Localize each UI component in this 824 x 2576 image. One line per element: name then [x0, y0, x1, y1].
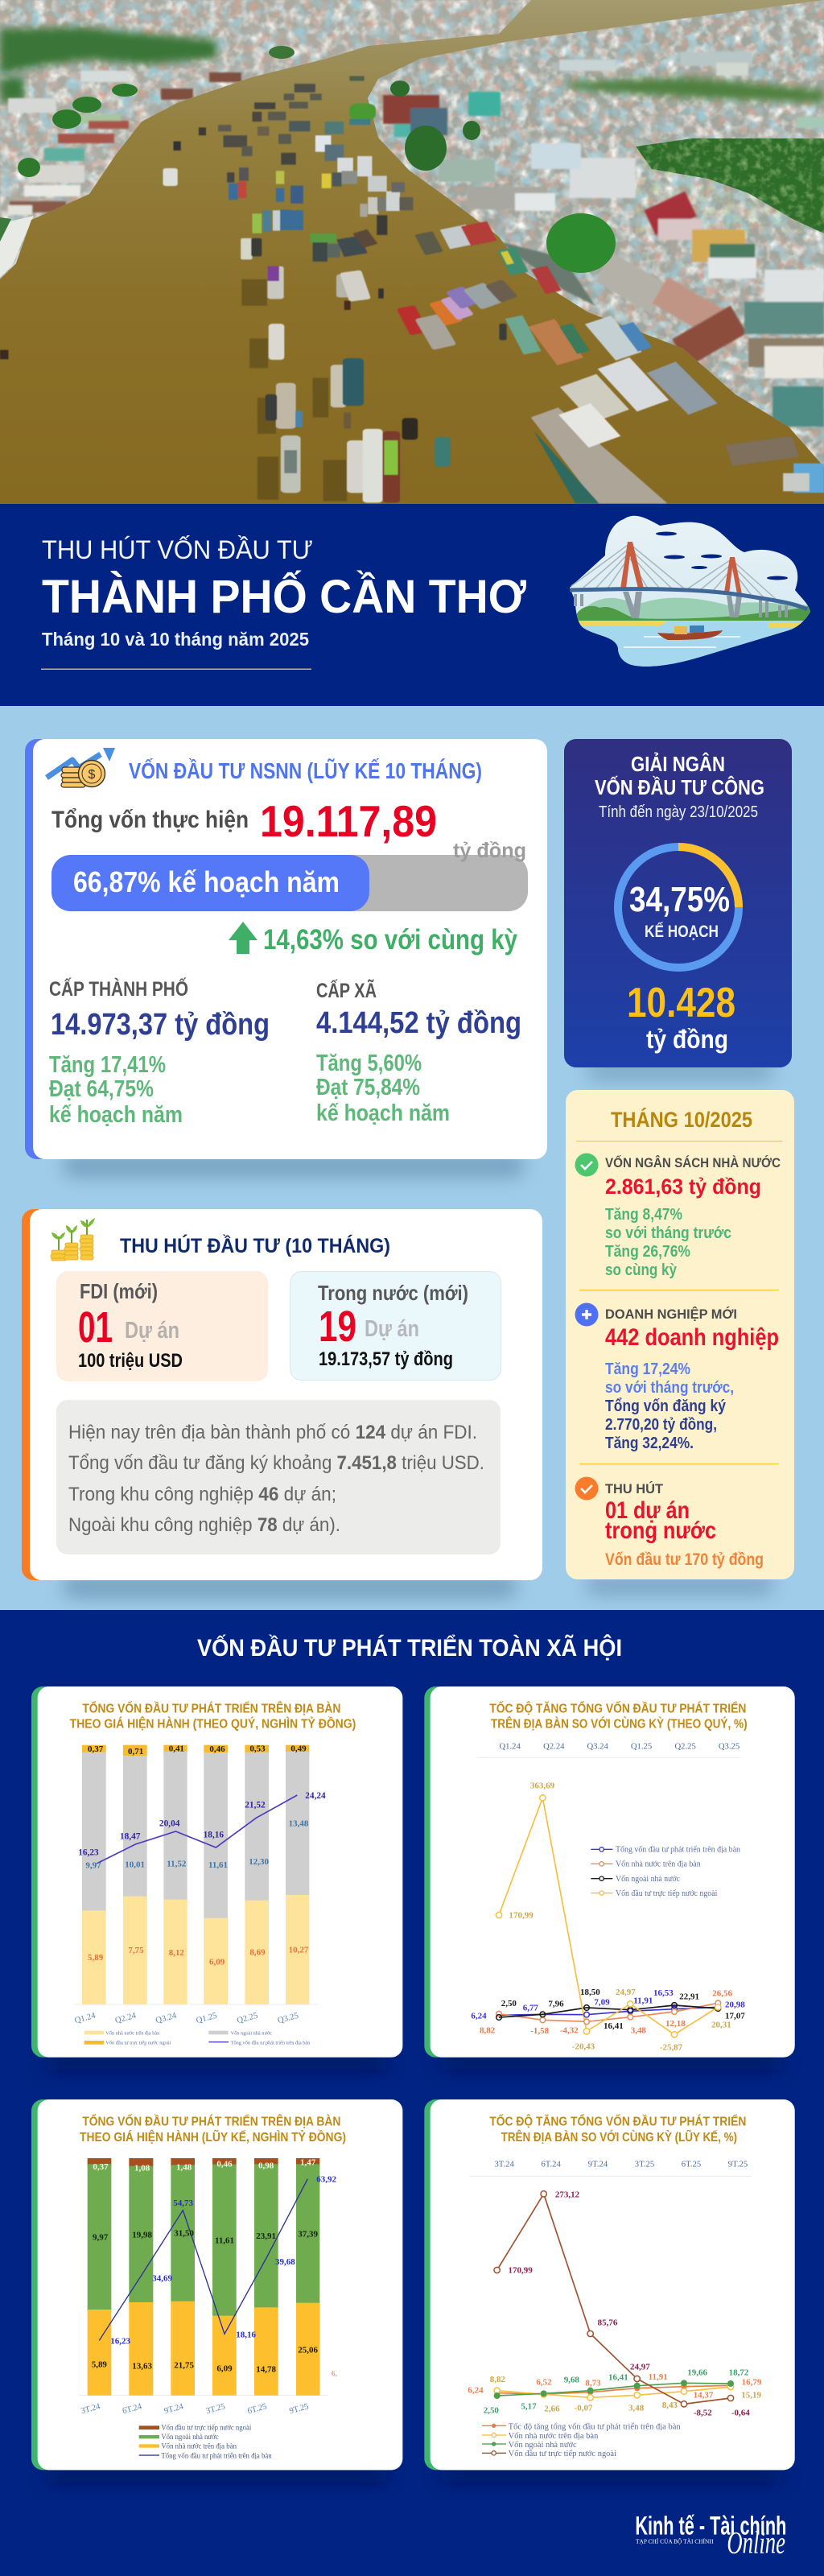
commune level column: Tăng 5,60%	[316, 1051, 422, 1076]
line chart: 2,50	[501, 1999, 517, 2008]
line chart	[468, 2161, 762, 2418]
stacked bar chart: 16,23	[78, 1847, 99, 1857]
line chart: 16,79	[742, 2377, 762, 2387]
stacked bar chart: 0,37	[93, 2162, 109, 2172]
stacked bar chart: 18,16	[236, 2330, 257, 2340]
new enterprises block: Tăng 17,24%	[605, 1360, 690, 1378]
stacked bar chart	[74, 1744, 326, 2025]
chart legend: Tổng vốn đầu tư phát triển trên địa bàn	[161, 2451, 272, 2459]
new enterprises block: so với tháng trước,	[605, 1379, 734, 1397]
stacked bar chart: 39,68	[275, 2257, 295, 2267]
logo: Kinh te - Tai chinh Online: TẠP CHÍ CỦA BỘ TÀI CHÍNH	[636, 2537, 714, 2545]
card: FDI: 100 triệu USD	[78, 1350, 183, 1372]
card: FDI: 01	[78, 1303, 113, 1352]
panel: investment attraction	[22, 1209, 542, 1580]
stacked bar chart: 10,01	[125, 1860, 145, 1870]
state budget block: VỐN NGÂN SÁCH NHÀ NƯỚC	[605, 1154, 781, 1170]
state budget block: Tăng 26,76%	[605, 1243, 690, 1261]
chart legend: Vốn đầu tư trực tiếp nước ngoài	[105, 2040, 171, 2046]
line chart: 8,43	[662, 2401, 678, 2410]
chart title	[489, 2113, 746, 2145]
icon: coins with rising arrow	[47, 748, 115, 787]
line chart: 18,50	[580, 1988, 600, 1997]
city level column: Đạt 64,75%	[49, 1076, 154, 1102]
state budget block: 2.861,63 tỷ đồng	[605, 1174, 761, 1199]
chart panel: total investment by quarter	[31, 1686, 402, 2058]
chart title	[80, 2113, 346, 2145]
stacked bar chart: 6T.25	[246, 2402, 268, 2416]
card: FDI: FDI (mới)	[80, 1279, 158, 1303]
date note: Tính đến ngày 23/10/2025	[599, 803, 758, 821]
progress bar track	[52, 855, 528, 911]
attraction block: THU HÚT	[605, 1481, 664, 1496]
line chart: 6T.24	[541, 2161, 562, 2169]
stacked bar chart: 7,75	[128, 1946, 144, 1955]
line chart: 16,41	[604, 2021, 624, 2031]
line chart: 20,98	[725, 2000, 745, 2010]
stacked bar chart: 0,53	[249, 1744, 266, 1754]
chart legend: Vốn ngoài nhà nước	[509, 2441, 577, 2450]
stacked bar chart: 5,89	[92, 2359, 107, 2369]
light blue section background	[0, 706, 824, 1610]
line chart: Q2.25	[674, 1743, 696, 1752]
heading	[595, 752, 764, 799]
city level column: CẤP THÀNH PHỐ	[49, 976, 188, 1001]
stacked bar chart: 23,91	[256, 2231, 276, 2241]
line chart: 6,52	[536, 2378, 552, 2388]
line chart: 14,37	[694, 2390, 714, 2400]
gold rule	[41, 668, 311, 670]
chart legend: Vốn nhà nước trên địa bàn	[161, 2442, 237, 2450]
city level column	[49, 976, 270, 1128]
line chart: 11,91	[649, 2372, 668, 2382]
line chart: 22,91	[679, 1992, 699, 2001]
stacked bar chart: 5,89	[88, 1953, 104, 1963]
icon: coin stacks with sprouts	[51, 1218, 95, 1261]
stacked bar chart: 9,97	[85, 1861, 101, 1871]
new enterprises block: Tăng 32,24%.	[605, 1435, 694, 1452]
chart title: TỐC ĐỘ TĂNG TỔNG VỐN ĐẦU TƯ PHÁT TRIỂN	[489, 1700, 746, 1716]
stacked bar chart: Q1.25	[196, 2012, 218, 2025]
line chart: 7,96	[548, 2000, 564, 2009]
total capital value: 19.117,89	[260, 796, 437, 846]
disbursed value: 10.428	[627, 980, 735, 1026]
stacked bar chart: 9T.25	[288, 2402, 310, 2416]
chart title: TRÊN ĐỊA BÀN SO VỚI CÙNG KỲ (LŨY KẾ, %)	[501, 2128, 737, 2145]
stacked bar chart: 18,47	[120, 1831, 141, 1841]
donut chart: 34,75%	[629, 880, 730, 919]
line chart: 8,82	[490, 2375, 505, 2384]
card: domestic: Trong nước (mới)	[318, 1281, 468, 1305]
stacked bar chart: 54,73	[173, 2198, 194, 2208]
heading: VỐN ĐẦU TƯ NSNN (LŨY KẾ 10 THÁNG)	[129, 758, 482, 783]
chart legend: Vốn ngoài nhà nước	[231, 2031, 272, 2037]
card: FDI: Dự án	[125, 1318, 179, 1344]
stacked bar chart: 20,04	[159, 1818, 180, 1828]
subtitle: Tháng 10 và 10 tháng năm 2025	[42, 629, 309, 650]
line chart: 12,18	[665, 2019, 686, 2029]
line chart: 17,07	[725, 2012, 745, 2021]
state budget block: Tăng 8,47%	[605, 1206, 682, 1224]
line chart: 16,41	[608, 2373, 628, 2383]
stacked bar chart: 11,61	[215, 2236, 234, 2246]
attraction block: trong nước	[605, 1517, 716, 1544]
stacked bar chart: 31,50	[174, 2228, 195, 2238]
stacked bar chart: 34,69	[152, 2273, 173, 2283]
card: domestic: Dự án	[365, 1316, 419, 1342]
FDI summary text box	[56, 1400, 501, 1554]
FDI summary text box: Ngoài khu công nghiệp 78 dự án).	[68, 1514, 340, 1536]
line chart: 18,72	[729, 2368, 749, 2378]
line chart: 9,68	[564, 2376, 579, 2385]
line chart: -8,52	[694, 2409, 712, 2418]
stacked bar chart: 6,	[332, 2370, 337, 2378]
river boat	[657, 625, 723, 640]
chart legend: Vốn ngoài nhà nước	[616, 1875, 681, 1884]
unit label: tỷ đồng	[453, 838, 526, 862]
FDI summary text box: Trong khu công nghiệp 46 dự án;	[68, 1484, 336, 1505]
year on year growth: 14,63% so với cùng kỳ	[263, 924, 517, 956]
stacked bar chart: 14,78	[256, 2364, 277, 2374]
stacked bar chart: 1,48	[176, 2162, 192, 2172]
stacked bar chart: 12,30	[249, 1857, 270, 1867]
stacked bar chart: 0,46	[216, 2159, 233, 2169]
commune level column: kế hoạch năm	[316, 1100, 450, 1126]
boats and moored houses, drawn in a stretched grid	[0, 76, 824, 503]
total capital label: Tổng vốn thực hiện	[52, 807, 249, 833]
chart title: THEO GIÁ HIỆN HÀNH (THEO QUÝ, NGHÌN TỶ ĐỒNG)	[70, 1716, 356, 1732]
chart legend	[482, 2422, 681, 2458]
stacked bar chart: 25,06	[298, 2345, 319, 2355]
stacked bar chart: Q2.25	[236, 2012, 259, 2025]
line chart: 85,76	[598, 2318, 618, 2328]
donut chart	[618, 847, 739, 968]
stacked bar chart: 21,75	[174, 2360, 195, 2370]
donut chart: KẾ HOẠCH	[645, 923, 719, 941]
new enterprises block: DOANH NGHIỆP MỚI	[605, 1307, 737, 1322]
section heading: VỐN ĐẦU TƯ PHÁT TRIỂN TOÀN XÃ HỘI	[197, 1634, 622, 1662]
line chart: 20,31	[711, 2021, 731, 2030]
chart legend: Vốn nhà nước trên địa bàn	[616, 1860, 701, 1869]
line chart: 26,56	[712, 1989, 733, 1999]
chart legend: Vốn đầu tư trực tiếp nước ngoài	[161, 2424, 252, 2432]
stacked bar chart: 21,52	[245, 1800, 266, 1810]
main title: THÀNH PHỐ CẦN THƠ	[42, 571, 526, 623]
stacked bar chart: 8,69	[249, 1948, 266, 1958]
commune level column	[316, 978, 521, 1126]
line chart: 3T.25	[635, 2161, 654, 2169]
stacked bar chart: 24,24	[305, 1791, 326, 1801]
stacked bar chart: 0,46	[209, 1744, 225, 1754]
new enterprises block: 2.770,20 tỷ đồng,	[605, 1416, 717, 1434]
chart title: THEO GIÁ HIỆN HÀNH (LŨY KẾ, NGHÌN TỶ ĐỒNG)	[80, 2128, 346, 2145]
line chart: 363,69	[530, 1781, 555, 1791]
state budget block: so với tháng trước	[605, 1224, 731, 1242]
line chart: 24,97	[630, 2363, 650, 2372]
line chart: -1,58	[530, 2026, 550, 2036]
state budget block	[605, 1154, 781, 1279]
bridge deck	[570, 589, 807, 609]
line chart: 3,48	[631, 2025, 646, 2035]
stacked bar chart: 13,48	[289, 1818, 309, 1828]
logo: Kinh te - Tai chinh Online	[635, 2511, 786, 2561]
stacked bar chart: 6T.24	[122, 2402, 143, 2416]
stacked bar chart: 9T.24	[163, 2402, 185, 2416]
line chart: 2,66	[544, 2404, 560, 2413]
icon: Can Tho bridge illustration	[570, 515, 810, 667]
line chart: 7,09	[594, 1998, 610, 2008]
line chart: 19,66	[687, 2368, 708, 2378]
attraction block: Vốn đầu tư 170 tỷ đồng	[605, 1550, 764, 1569]
line chart: 2,50	[484, 2405, 499, 2415]
line chart: 6T.25	[682, 2161, 701, 2169]
line chart: 6,77	[523, 2003, 538, 2013]
chart legend: Vốn đầu tư trực tiếp nước ngoài	[509, 2450, 616, 2458]
line chart: 5,17	[521, 2402, 537, 2412]
line chart: Q3.24	[587, 1743, 609, 1752]
stacked bar chart: Q2.24	[114, 2012, 138, 2025]
chart legend: Vốn ngoài nhà nước	[161, 2433, 219, 2441]
city level column: Tăng 17,41%	[49, 1052, 166, 1078]
stacked bar chart: 18,16	[204, 1831, 224, 1840]
heading: THÁNG 10/2025	[611, 1107, 752, 1132]
panel: NSNN investment capital	[25, 739, 547, 1159]
title kicker: THU HÚT VỐN ĐẦU TƯ	[42, 535, 313, 564]
line chart: Q1.24	[499, 1743, 521, 1752]
chart panel: growth rate by quarter	[424, 1686, 795, 2058]
stacked bar chart: 0,41	[169, 1744, 184, 1753]
photo: floating market on the river	[0, 0, 824, 504]
stacked bar chart: 1,47	[300, 2157, 316, 2167]
line chart: -0,07	[575, 2403, 593, 2413]
line chart: 8,73	[585, 2378, 601, 2388]
chart title	[489, 1700, 748, 1732]
stacked bar chart: 3T.24	[80, 2402, 101, 2416]
stacked bar chart: 6,09	[209, 1957, 225, 1967]
new enterprises block: Tổng vốn đăng ký	[605, 1397, 727, 1415]
commune level column: 4.144,52 tỷ đồng	[316, 1006, 521, 1040]
chart legend: Vốn đầu tư trực tiếp nước ngoài	[616, 1889, 718, 1898]
line chart: 8,82	[480, 2025, 496, 2035]
line chart: -4,32	[560, 2025, 579, 2035]
chart panel: cumulative total investment	[31, 2099, 402, 2470]
header band: title block	[0, 504, 824, 706]
stacked bar chart: 3T.25	[205, 2402, 226, 2416]
chart title	[70, 1700, 356, 1732]
chart legend: Tốc độ tăng tổng vốn đầu tư phát triển trên địa bàn	[509, 2422, 681, 2431]
stacked bar chart: 11,61	[208, 1860, 228, 1870]
card: domestic: 19	[319, 1302, 356, 1351]
chart legend: Vốn nhà nước trên địa bàn	[105, 2031, 160, 2037]
line chart	[471, 1743, 745, 2052]
city level column: kế hoạch năm	[49, 1102, 183, 1128]
line chart: 24,97	[616, 1988, 636, 1997]
commune level column: Đạt 75,84%	[316, 1075, 420, 1100]
stacked bar chart: 0,37	[88, 1744, 104, 1754]
icon: green up arrow	[229, 922, 258, 954]
sky clouds	[656, 531, 788, 580]
commune level column: CẤP XÃ	[316, 978, 377, 1002]
line chart: 9T.24	[588, 2161, 608, 2169]
state budget block: so cùng kỳ	[605, 1261, 678, 1279]
heading: THU HÚT ĐẦU TƯ (10 THÁNG)	[120, 1233, 390, 1257]
line chart: -25,87	[660, 2042, 683, 2052]
progress bar fill	[52, 855, 369, 911]
chart panel: cumulative growth rate	[424, 2099, 795, 2470]
stacked bar chart: 9,97	[93, 2232, 109, 2242]
icon: green check	[575, 1153, 599, 1177]
line chart: 11,91	[633, 1996, 653, 2005]
stacked bar chart: Q3.24	[154, 2012, 178, 2025]
line chart: 3,48	[628, 2403, 645, 2413]
FDI summary text box: Hiện nay trên địa bàn thành phố có 124 dự án FDI.	[68, 1422, 477, 1443]
stacked bar chart: 0,71	[128, 1747, 143, 1757]
line chart: 170,99	[509, 1910, 534, 1920]
chart title: TỐC ĐỘ TĂNG TỔNG VỐN ĐẦU TƯ PHÁT TRIỂN	[489, 2113, 746, 2129]
chart title: TỔNG VỐN ĐẦU TƯ PHÁT TRIỂN TRÊN ĐỊA BÀN	[82, 2113, 340, 2129]
new enterprises block	[605, 1307, 779, 1452]
stacked bar chart: 16,23	[110, 2337, 131, 2347]
icon: coins with rising arrow: $	[89, 768, 96, 782]
line chart: Q3.25	[719, 1743, 740, 1752]
line chart: 273,12	[555, 2190, 580, 2199]
attraction block	[605, 1481, 764, 1569]
stacked bar chart: 0,49	[290, 1744, 307, 1753]
bridge towers	[620, 542, 742, 594]
chart legend: Tổng vốn đầu tư phát triển trên địa bàn	[231, 2040, 311, 2046]
stacked bar chart: 6,09	[216, 2363, 233, 2373]
FDI summary text box: Tổng vốn đầu tư đăng ký khoảng 7.451,8 triệu USD.	[68, 1452, 484, 1474]
card: domestic: 19.173,57 tỷ đồng	[319, 1348, 453, 1370]
stacked bar chart: Q3.25	[277, 2012, 299, 2025]
progress label: 66,87% kế hoạch năm	[73, 865, 340, 898]
stacked bar chart: 10,27	[289, 1946, 309, 1955]
line chart: 15,19	[741, 2390, 762, 2400]
chart title: TRÊN ĐỊA BÀN SO VỚI CÙNG KỲ (THEO QUÝ, %)	[491, 1716, 748, 1732]
icon: orange check	[575, 1476, 599, 1501]
stacked bar chart: 8,12	[169, 1948, 184, 1958]
hulls on open water	[258, 456, 278, 499]
stacked bar chart: 13,63	[132, 2362, 153, 2372]
stacked bar chart: Q1.24	[74, 2012, 97, 2025]
panel: public investment disbursement	[564, 739, 792, 1067]
line chart: 16,53	[653, 1988, 674, 1998]
line chart: Q1.25	[631, 1743, 652, 1752]
city level column: 14.973,37 tỷ đồng	[51, 1008, 270, 1042]
line chart: Q2.24	[543, 1743, 565, 1752]
stacked bar chart: 19,98	[132, 2230, 153, 2240]
chart legend	[591, 1846, 740, 1898]
stacked bar chart: 63,92	[316, 2175, 337, 2185]
chart title: TỔNG VỐN ĐẦU TƯ PHÁT TRIỂN TRÊN ĐỊA BÀN	[82, 1700, 340, 1716]
line chart: 3T.24	[494, 2161, 515, 2169]
card: domestic	[290, 1272, 501, 1380]
attraction block: 01 dự án	[605, 1497, 690, 1524]
stacked bar chart: 0,98	[258, 2161, 274, 2171]
stacked bar chart: 1,08	[134, 2164, 150, 2174]
bridge cables	[571, 543, 777, 600]
unit: tỷ đồng	[646, 1025, 728, 1054]
chart legend: Vốn nhà nước trên địa bàn	[509, 2432, 598, 2441]
logo: Kinh te - Tai chinh Online: Online	[727, 2525, 785, 2561]
line chart: 9T.25	[728, 2161, 748, 2169]
chart legend	[84, 2031, 311, 2046]
card: FDI	[56, 1271, 268, 1381]
stacked bar chart: 11,52	[167, 1860, 187, 1869]
chart legend	[139, 2424, 272, 2459]
line chart: 170,99	[509, 2266, 533, 2276]
chart legend: Tổng vốn đầu tư phát triển trên địa bàn	[616, 1846, 740, 1855]
heading: GIẢI NGÂN	[631, 752, 725, 776]
line chart: 6,24	[471, 2012, 487, 2021]
new enterprises block: 442 doanh nghiệp	[605, 1324, 779, 1351]
line chart: -20,43	[572, 2042, 595, 2052]
line chart: 6,24	[468, 2386, 484, 2396]
stacked bar chart	[79, 2157, 337, 2416]
heading: VỐN ĐẦU TƯ CÔNG	[595, 775, 764, 799]
icon: blue plus	[575, 1302, 599, 1327]
line chart: -0,64	[731, 2408, 750, 2417]
panel: October 2025	[566, 1090, 794, 1579]
stacked bar chart: 37,39	[298, 2229, 319, 2239]
